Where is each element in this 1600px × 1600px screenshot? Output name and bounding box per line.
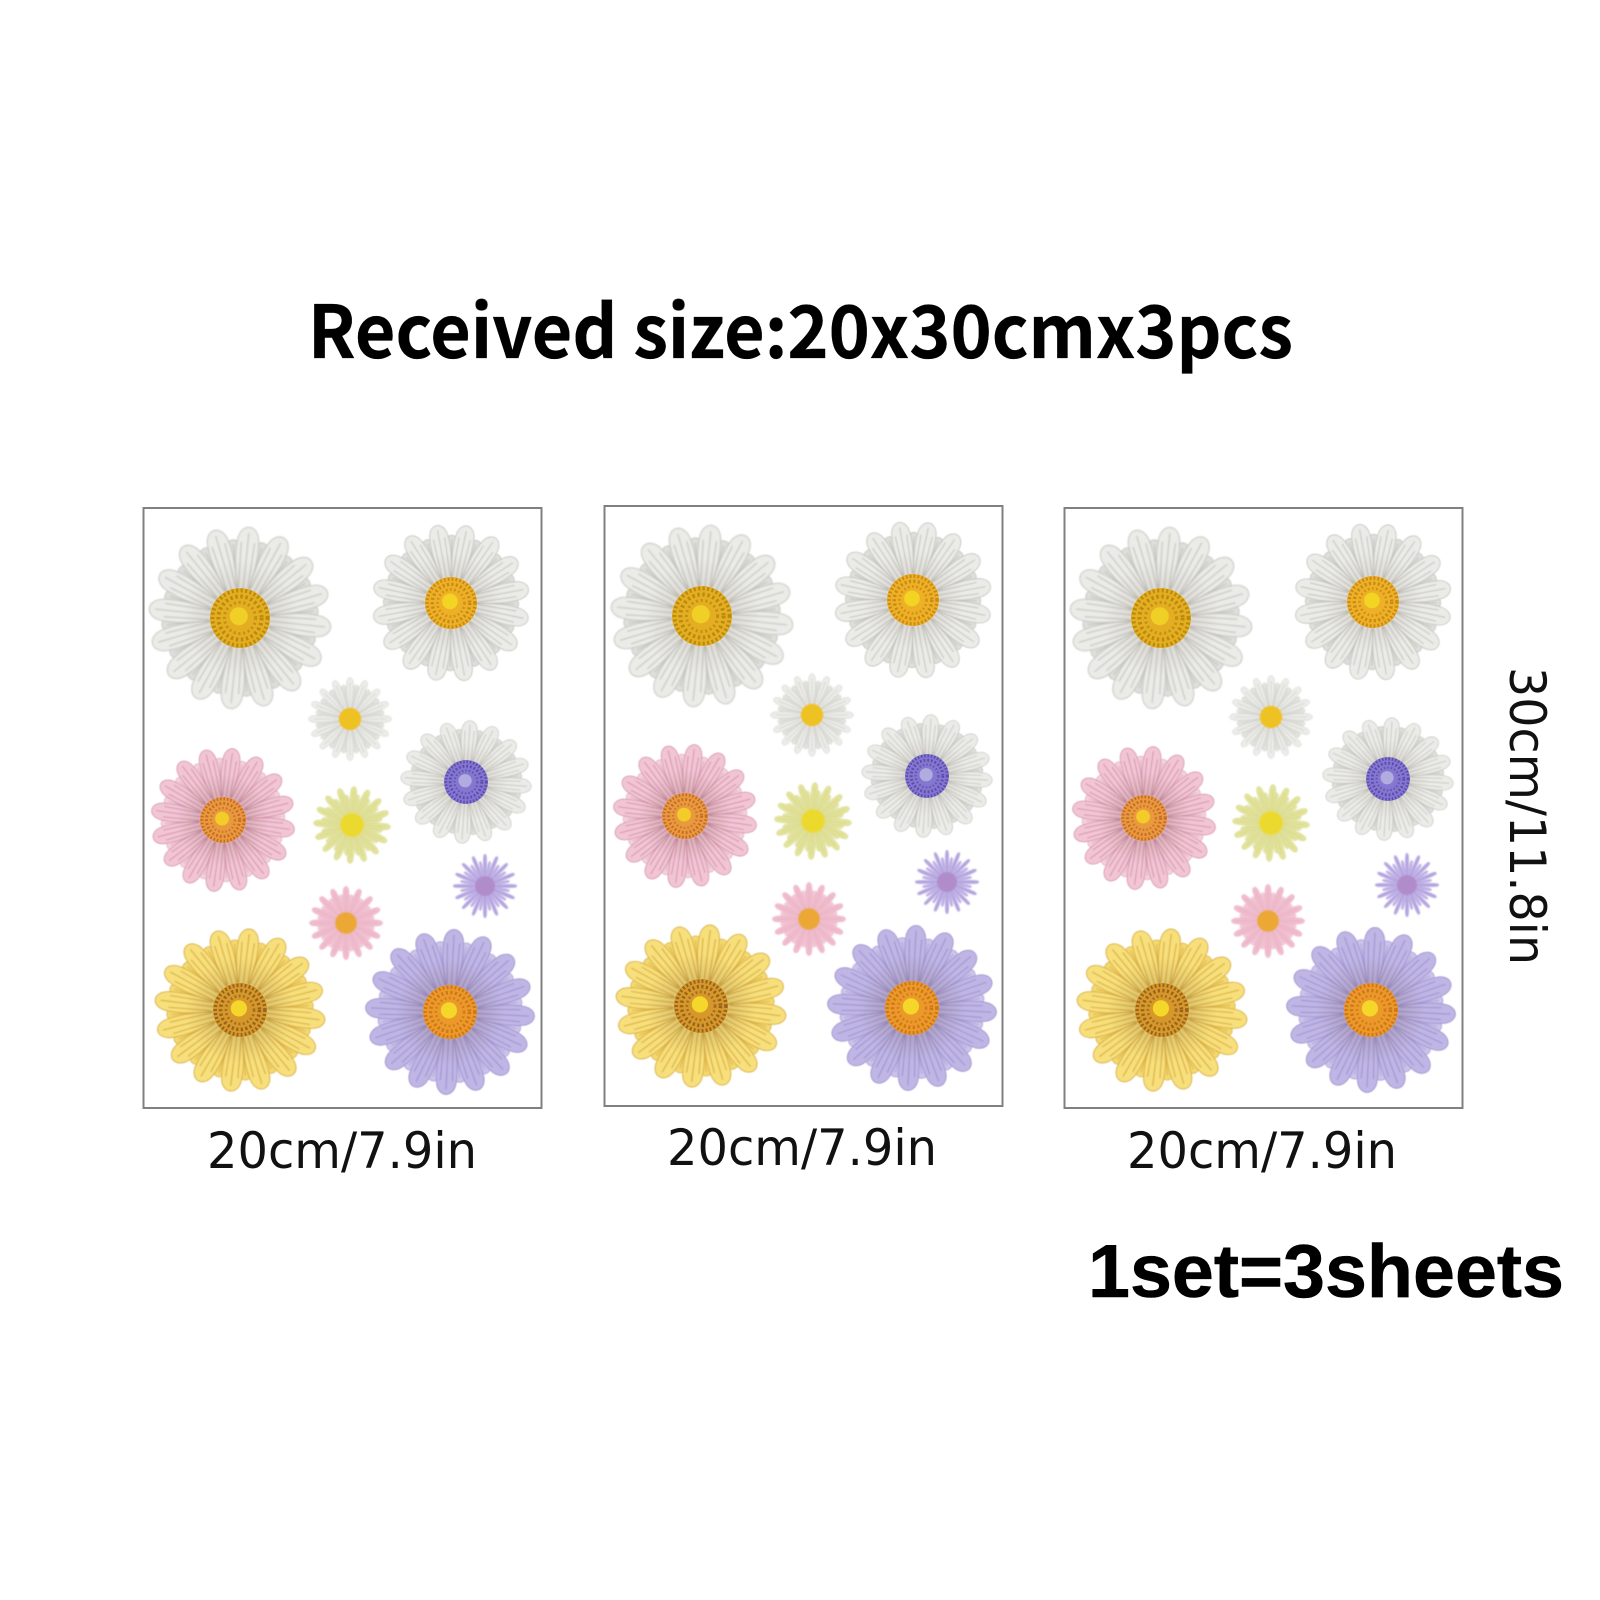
flower: large white daisy	[1060, 517, 1262, 719]
flower: small white daisy	[309, 678, 391, 760]
flower: large lilac daisy	[360, 924, 540, 1100]
flower: white daisy with purple centre	[1318, 712, 1458, 846]
flower: small yellow daisy	[1231, 783, 1311, 863]
width label: sheet 2: 20cm/7.9in	[667, 1119, 937, 1177]
flower: small white daisy	[771, 674, 853, 756]
height label: 30cm/11.8in	[1498, 667, 1556, 965]
flower: small lilac daisy	[1375, 853, 1439, 917]
flower: small lilac daisy	[453, 854, 517, 918]
flower: large yellow daisy	[1066, 918, 1258, 1102]
flower: large white daisy	[601, 515, 803, 717]
flower: small yellow daisy	[773, 781, 853, 861]
flower: small pink daisy	[1231, 884, 1305, 958]
flower: pink daisy	[1062, 736, 1226, 900]
flower: small pink daisy	[309, 886, 383, 960]
flower: white daisy	[819, 506, 1007, 694]
flower: small lilac daisy	[915, 850, 979, 914]
flower: large yellow daisy	[605, 914, 797, 1098]
flower: large lilac daisy	[1281, 922, 1461, 1098]
flower: large yellow daisy	[144, 918, 336, 1102]
flower: pink daisy	[141, 738, 305, 902]
panel: sheet 3	[1060, 508, 1467, 1108]
flower: pink daisy	[603, 734, 767, 898]
flower: small yellow daisy	[312, 785, 392, 865]
flower: white daisy	[357, 509, 545, 697]
flower: large white daisy	[139, 517, 341, 719]
width label: sheet 3: 20cm/7.9in	[1127, 1122, 1397, 1180]
flower: large lilac daisy	[822, 920, 1002, 1096]
flower: white daisy with purple centre	[857, 709, 997, 843]
flower: white daisy	[1279, 508, 1467, 696]
title: Received size:20x30cmx3pcs	[308, 274, 1293, 380]
flower: white daisy with purple centre	[396, 715, 536, 849]
set count note: 1set=3sheets	[1088, 1229, 1564, 1313]
width label: sheet 1: 20cm/7.9in	[207, 1122, 477, 1180]
panel: sheet 1	[139, 508, 545, 1108]
flower: small white daisy	[1230, 676, 1312, 758]
panel: sheet 2	[601, 506, 1007, 1106]
flower: small pink daisy	[772, 882, 846, 956]
